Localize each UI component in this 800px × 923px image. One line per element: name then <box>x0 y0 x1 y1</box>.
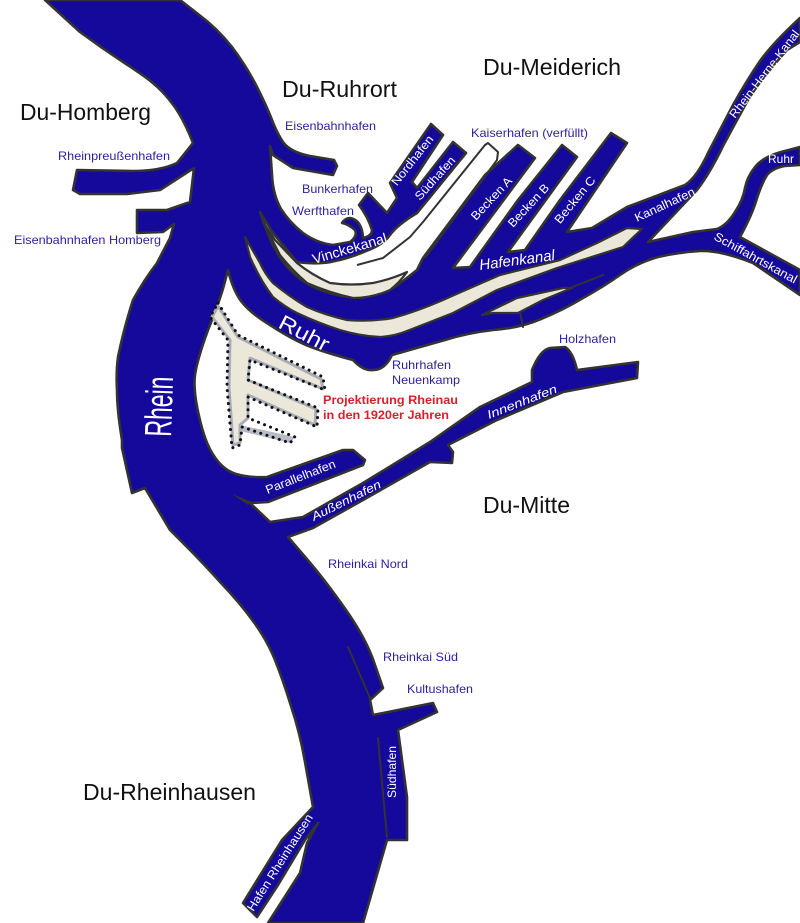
labels on water: Südhafen <box>385 746 399 798</box>
harbour labels on land: Rheinkai Nord <box>328 557 408 571</box>
labels on water: Schiffahrtskanal <box>712 229 800 286</box>
labels on water <box>138 27 800 914</box>
harbour labels on land: Ruhrhafen <box>392 358 451 372</box>
harbour labels on land: Rheinpreußenhafen <box>58 149 170 163</box>
district names: Du-Mitte <box>483 492 570 518</box>
labels on water: Becken A <box>468 174 515 223</box>
labels on water: Rhein <box>138 376 182 437</box>
harbour labels on land: Eisenbahnhafen <box>285 119 376 133</box>
Rheinau project note <box>323 393 458 422</box>
district names <box>20 54 621 805</box>
district names: Du-Meiderich <box>483 54 621 80</box>
Rheinau project note: in den 1920er Jahren <box>323 408 449 422</box>
harbour labels on land <box>14 119 616 696</box>
harbour labels on land: Neuenkamp <box>392 373 460 387</box>
harbour labels on land: Eisenbahnhafen Homberg <box>14 233 161 247</box>
district names: Du-Ruhrort <box>282 76 398 102</box>
labels on water: Ruhr <box>275 311 333 356</box>
labels on water: Innenhafen <box>485 382 559 422</box>
harbour labels on land: Bunkerhafen <box>302 182 373 196</box>
labels on water: Hafenkanal <box>478 247 557 274</box>
district names: Du-Rheinhausen <box>83 779 256 805</box>
harbour labels on land: Kultushafen <box>407 682 473 696</box>
planned Rheinau harbour, 1920s <box>210 303 325 448</box>
labels on water: Becken C <box>551 173 599 226</box>
labels on water: Nordhafen <box>388 133 436 188</box>
harbour labels on land: Holzhafen <box>559 332 616 346</box>
harbour labels on land: Rheinkai Süd <box>383 650 458 664</box>
labels on water: Hafen Rheinhausen <box>244 811 316 914</box>
filled-in land: sand islands along the Ruhr and Hafenkanal <box>245 222 642 337</box>
labels on water: Vinckekanal <box>310 230 389 267</box>
labels on water: Kanalhafen <box>632 185 697 225</box>
Rheinau project note: Projektierung Rheinau <box>323 393 458 407</box>
harbour labels on land: Kaiserhafen (verfüllt) <box>471 126 588 140</box>
labels on water: Südhafen <box>412 154 458 203</box>
district names: Du-Homberg <box>20 99 151 125</box>
labels on water: Ruhr <box>768 152 794 166</box>
labels on water: Parallelhafen <box>263 457 337 497</box>
labels on water: Außenhafen <box>308 477 384 524</box>
labels on water: Rhein-Herne-Kanal <box>726 27 800 121</box>
filled-in Kaiserhafen basin <box>357 143 498 265</box>
harbour labels on land: Werfthafen <box>292 204 354 218</box>
labels on water: Becken B <box>505 181 552 230</box>
